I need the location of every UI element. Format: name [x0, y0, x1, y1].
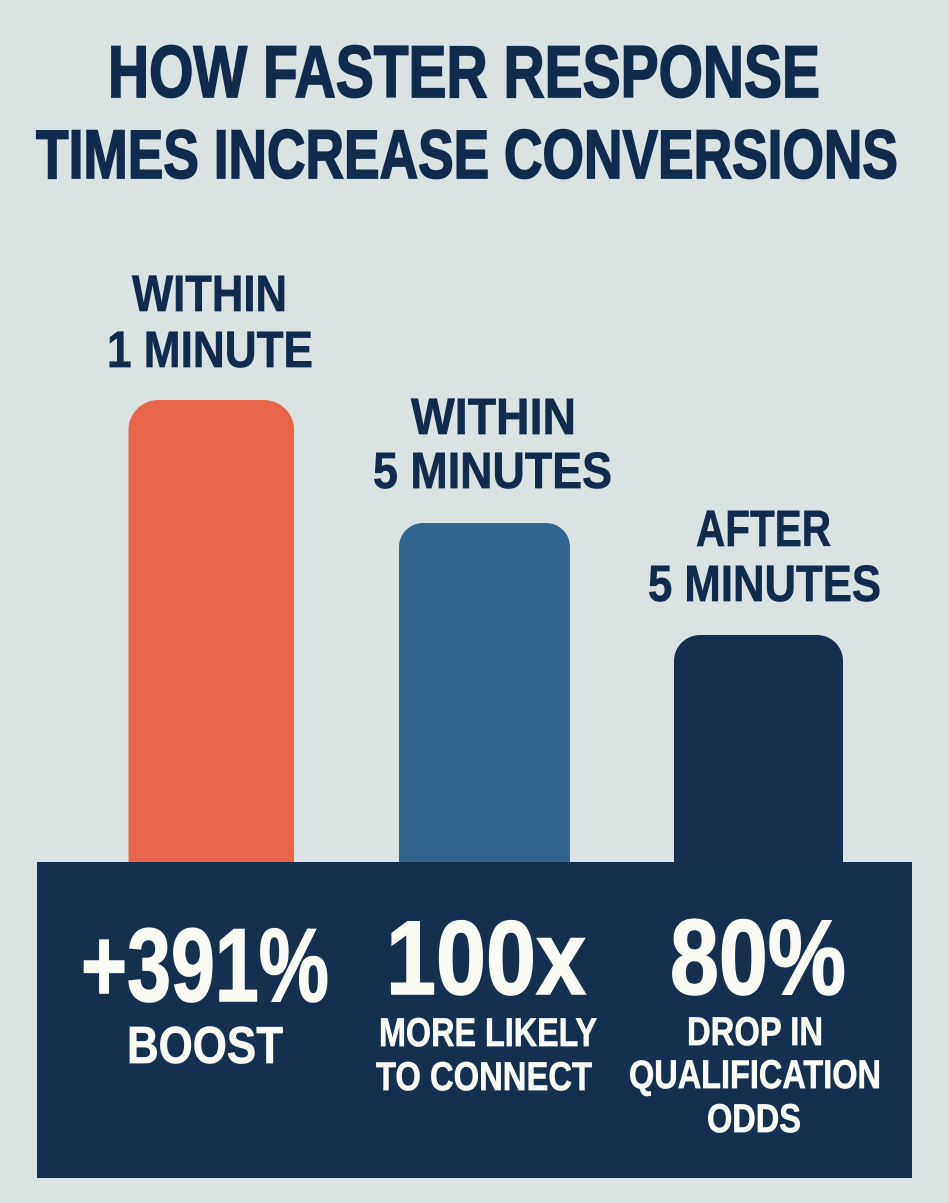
stat: 80% drop in qualification odds: [629, 897, 881, 1141]
bar: after 5 minutes: [674, 635, 843, 862]
stat: 100x more likely to connect: MORE LIKELY: [379, 1011, 597, 1055]
stat: 100x more likely to connect: 100x: [386, 900, 586, 1017]
label: within 1 minute: [107, 265, 313, 378]
panel: statistics: [37, 862, 912, 1178]
label: within 5 minutes: WITHIN: [411, 388, 576, 445]
stat: 80% drop in qualification odds: QUALIFICATION: [629, 1053, 881, 1097]
bar: within 1 minute: [128, 400, 294, 862]
label: within 5 minutes: 5 MINUTES: [373, 442, 612, 499]
label: within 5 minutes: [373, 388, 612, 499]
stat: +391% boost: BOOST: [127, 1017, 283, 1075]
bar: within 5 minutes: [399, 523, 570, 862]
label: within 1 minute: WITHIN: [132, 265, 287, 322]
label: after 5 minutes: 5 MINUTES: [648, 555, 881, 612]
label: within 1 minute: 1 MINUTE: [107, 321, 313, 378]
stat: +391% boost: +391%: [81, 908, 329, 1024]
stat: 80% drop in qualification odds: DROP IN: [687, 1010, 823, 1054]
stat: 100x more likely to connect: TO CONNECT: [376, 1055, 592, 1099]
title: [36, 32, 898, 193]
stat: +391% boost: [81, 908, 329, 1075]
stat: 80% drop in qualification odds: ODDS: [707, 1097, 801, 1141]
label: after 5 minutes: AFTER: [696, 500, 831, 557]
stat: 100x more likely to connect: [376, 900, 597, 1099]
stat: 80% drop in qualification odds: 80%: [670, 897, 846, 1017]
label: after 5 minutes: [648, 500, 881, 612]
